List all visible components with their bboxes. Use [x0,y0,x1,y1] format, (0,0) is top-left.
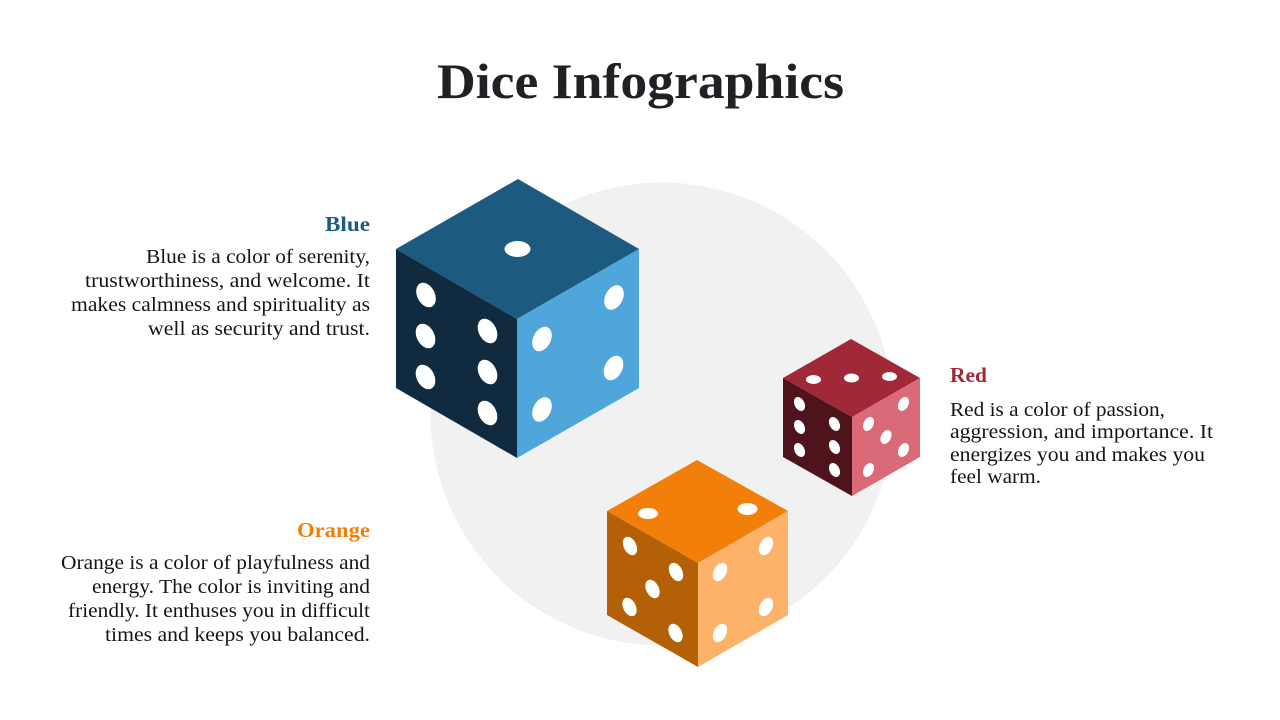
red die [783,339,920,496]
text block: orange: friendly. It enthuses you in difficult [68,600,370,622]
orange die left face [607,511,698,667]
text block: orange [61,552,370,646]
text block: red: energizes you and makes you [950,444,1205,466]
title: Dice Infographics [437,53,844,109]
red die right face [852,378,920,496]
text block: orange: Orange is a color of playfulness and [61,552,370,574]
text block: red: aggression, and importance. It [950,421,1213,443]
orange die [607,460,788,667]
heading: red: Red [950,363,987,387]
text block: blue: trustworthiness, and welcome. It [85,270,370,292]
heading: orange: Orange [297,518,370,542]
red die left face [783,378,852,496]
text block: red: feel warm. [950,466,1041,488]
orange die top face [607,460,788,563]
text block: blue: makes calmness and spirituality as [71,294,370,316]
blue die right face [517,249,639,458]
text block: orange: energy. The color is inviting and [92,576,370,598]
text block: red [950,399,1213,488]
blue die [396,179,639,458]
text block: blue: Blue is a color of serenity, [146,246,370,268]
background circle [430,182,894,646]
text block: blue: well as security and trust. [148,318,370,340]
heading: blue: Blue [325,212,370,236]
text block: red: Red is a color of passion, [950,399,1165,421]
red die top face [783,339,920,417]
text block: blue [71,246,370,340]
blue die left face [396,249,517,458]
text block: orange: times and keeps you balanced. [105,624,370,646]
orange die right face [698,511,788,667]
blue die top face [396,179,639,319]
